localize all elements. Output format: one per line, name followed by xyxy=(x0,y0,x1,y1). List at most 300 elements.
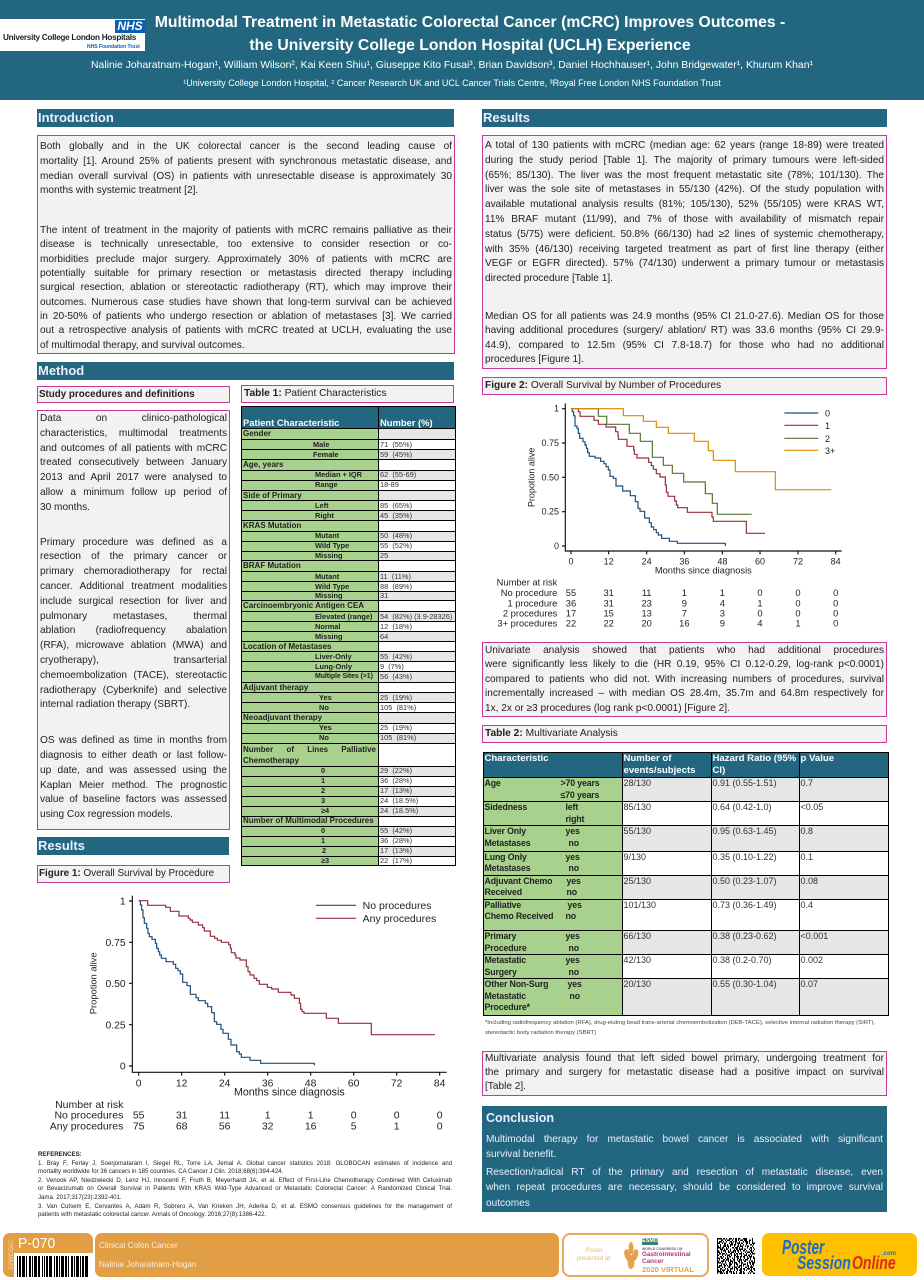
y axis tick labels: 1 xyxy=(120,897,126,908)
heading: Figure 1 xyxy=(37,865,230,883)
table 2: multivariate analysis: 0.7 xyxy=(800,778,813,788)
table 1: patient characteristics: 11 (11%) xyxy=(380,572,411,581)
table 1: patient characteristics: Location of Metastases xyxy=(243,642,331,651)
panel: study procedures text: characteristics, multimodal treatments xyxy=(40,428,227,439)
table 1: patient characteristics: 0 xyxy=(321,766,325,775)
table 2: multivariate analysis: 0.4 xyxy=(800,900,813,910)
presented at label: presented at: xyxy=(576,1256,612,1262)
table 2: multivariate analysis: no xyxy=(568,863,579,873)
table 2: multivariate analysis: events/subjects xyxy=(624,765,696,776)
table 2: multivariate analysis: 0.38 (0.2-0.70) xyxy=(712,955,772,965)
table 1: patient characteristics: 25 (19%) xyxy=(380,723,412,732)
y axis tick labels: 0.75 xyxy=(106,938,126,949)
references: patients with metastatic colorectal cancer. Annals of Oncology. 2016;27(8):1386-422. xyxy=(38,1211,266,1218)
table 2: multivariate analysis: Age xyxy=(484,778,501,788)
table 1: patient characteristics: 18-89 xyxy=(380,480,399,489)
ESMO mark: ESMO xyxy=(642,1238,658,1244)
table 1: patient characteristics: 1 xyxy=(321,776,325,785)
panel: study procedures text: Data on clinico-pathological xyxy=(40,413,227,424)
Online word: Online xyxy=(852,1253,896,1273)
number at risk table: 1 xyxy=(682,588,687,598)
chart: Figure 2 Kaplan-Meier xyxy=(497,403,842,629)
number at risk table: 32 xyxy=(262,1120,274,1132)
number at risk table: 1 xyxy=(394,1120,400,1132)
table 2: multivariate analysis: yes xyxy=(566,826,580,836)
table 2: multivariate analysis: p Value xyxy=(800,752,834,764)
panel: study procedures text: using Cox regression models. xyxy=(40,809,173,820)
header band xyxy=(0,0,924,100)
congress name: Gastrointestinal xyxy=(642,1251,691,1258)
panel: study procedures text: internal radiation therapy (SBRT). xyxy=(40,699,190,710)
axes xyxy=(562,403,842,554)
table 1: patient characteristics: Number (%) xyxy=(380,417,433,428)
number at risk table: 0 xyxy=(795,598,801,608)
number at risk table: 0 xyxy=(757,609,763,619)
x axis tick labels: 84 xyxy=(831,557,841,567)
table 1: patient characteristics: No xyxy=(319,733,329,742)
table 1: patient characteristics: Liver-Only xyxy=(315,652,352,661)
table 1: patient characteristics: 36 (28%) xyxy=(380,776,412,785)
presented at label: Poster xyxy=(585,1248,603,1254)
table 2: multivariate analysis: 28/130 xyxy=(624,778,651,788)
table 2: multivariate analysis: 55/130 xyxy=(624,826,651,836)
table 2: multivariate analysis: Metastatic xyxy=(484,991,526,1001)
table 1: patient characteristics: 24 (18.5%) xyxy=(380,796,418,805)
table 2: multivariate analysis: Hazard Ratio (95% xyxy=(712,752,796,764)
table 1: patient characteristics: 56 (43%) xyxy=(380,672,412,681)
panel: results text: VEGF or EGFR directed). 57% (74/130) underwent a primary tumour or metastasis xyxy=(485,258,884,269)
table 1: patient characteristics: Mutant xyxy=(315,572,339,581)
table 1: patient characteristics: Normal xyxy=(315,622,340,631)
table 1: patient characteristics: Multiple Sites (>1) xyxy=(315,673,373,680)
table 2: multivariate analysis: no xyxy=(566,887,577,897)
table 2: multivariate analysis: left xyxy=(566,802,578,812)
heading: Method: Method xyxy=(38,363,84,378)
table 1: patient characteristics: Patient Characteristic xyxy=(243,417,339,428)
legend: 1 xyxy=(825,421,830,431)
panel: introduction text: outcomes. Numerous case studies have shown that long-term survival can be achieved xyxy=(40,297,452,308)
x axis tick labels: Months since diagnosis xyxy=(234,1087,345,1099)
panel: study procedures text: Primary procedure was defined as a xyxy=(40,537,227,548)
heading: Table 1: Table 1: Patient Characteristics xyxy=(244,388,386,399)
table 2: multivariate analysis: 0.64 (0.42-1.0) xyxy=(712,802,772,812)
x axis tick labels: 36 xyxy=(679,557,689,567)
table 2: multivariate analysis: yes xyxy=(568,900,582,910)
number at risk table: 15 xyxy=(603,609,614,619)
table 1: patient characteristics: Range xyxy=(315,480,338,489)
heading: Figure 2: Figure 2: Overall Survival by Number of Procedures xyxy=(485,380,721,391)
table 2: multivariate analysis: >70 years xyxy=(560,778,600,788)
table 2: multivariate analysis: Palliative xyxy=(484,900,521,910)
x axis tick labels: 72 xyxy=(793,557,803,567)
x axis tick labels: 24 xyxy=(642,557,652,567)
author: Nalinie Joharatnam-Hogan xyxy=(99,1260,196,1269)
curve: no procedures xyxy=(139,901,314,1065)
axes xyxy=(129,896,447,1076)
number at risk table: 16 xyxy=(305,1120,317,1132)
table 1: patient characteristics: 105 (81%) xyxy=(380,703,416,712)
number at risk table: No procedures xyxy=(54,1110,123,1122)
panel: study procedures text: primary chemoradiotherapy for rectal xyxy=(40,566,227,577)
table 2: multivariate analysis: <0.05 xyxy=(800,802,823,812)
authors: Nalinie Joharatnam-Hogan¹, William Wilson², Kai Keen Shiu¹, Giuseppe Kito Fusai³, Brian Davidson³, Daniel Hochhauser¹, John Bridgewater¹, Khurum Khan¹ xyxy=(91,60,813,71)
table 1: patient characteristics: Number of Multimodal Procedures xyxy=(243,816,374,825)
presented at label xyxy=(576,1248,612,1262)
heading: Table 1 xyxy=(241,385,454,403)
number at risk table: 31 xyxy=(603,588,614,598)
panel: results text: (65%; 85/130). The liver was the most frequent metastatic site (78%; 101/130). The xyxy=(485,170,884,181)
table 1: patient characteristics: 2 xyxy=(321,786,325,795)
table 2: multivariate analysis: 42/130 xyxy=(624,955,651,965)
table 1: patient characteristics: BRAF Mutation xyxy=(243,561,301,570)
panel: study procedures text: value of baseline factors was assessed xyxy=(40,794,227,805)
panel: results text: 11% BRAF mutant (11/99), and 7% of those with availability of mismatch repair xyxy=(485,214,884,225)
legend: No procedures xyxy=(363,900,432,912)
number at risk table: Number at risk xyxy=(55,1099,124,1111)
panel: study procedures text: and outcomes of all patients with mCRC xyxy=(40,443,227,454)
number at risk table: 0 xyxy=(351,1110,357,1122)
table 1: patient characteristics: ≥4 xyxy=(321,806,329,815)
table 1: patient characteristics: Median + IQR xyxy=(315,470,362,479)
table 1: patient characteristics: 55 (42%) xyxy=(380,826,412,835)
table 2: multivariate analysis: yes xyxy=(566,876,581,886)
number at risk table: 0 xyxy=(437,1110,443,1122)
logo: UCLH NHS xyxy=(0,19,145,51)
table 2: multivariate analysis: Liver Only xyxy=(484,826,526,836)
legend xyxy=(316,900,436,925)
number at risk table xyxy=(50,1099,443,1132)
panel: study procedures text: up date, and was assessed using the xyxy=(40,765,227,776)
session code: 22WCGIC xyxy=(8,1240,15,1270)
references: or Bevacizumab on Overall Survival in Patients With KRAS Wild-Type Advanced or Metastatic Colorectal Cancer: A Randomized Clinical Trial. xyxy=(38,1185,452,1192)
panel: results text: status (5/75) were deficient. 50.8% (66/130) had ≥2 lines of systemic chemotherapy, xyxy=(485,229,884,240)
number at risk table: Any procedures xyxy=(50,1120,123,1132)
table 1: patient characteristics: Chemotherapy xyxy=(243,756,299,765)
conclusion text: survival benefit. xyxy=(486,1149,556,1160)
number at risk table: 3+ procedures xyxy=(497,619,558,629)
table 1: patient characteristics: 29 (22%) xyxy=(380,766,412,775)
table 2: multivariate analysis xyxy=(483,752,889,1016)
panel: study procedures text: cryotherapy), transarterial xyxy=(40,655,227,666)
table 2: multivariate analysis: yes xyxy=(566,852,580,862)
number at risk table: 1 procedure xyxy=(508,598,557,608)
y axis title: Propotion alive xyxy=(89,952,99,1014)
title: the University College London Hospital (UCLH) Experience xyxy=(249,37,691,54)
table 1: patient characteristics: 50 (48%) xyxy=(380,531,412,540)
table 1: patient characteristics: Elevated (range) xyxy=(315,612,373,621)
panel: study procedures text: diagnosis to either death or last follow- xyxy=(40,750,227,761)
number at risk table: 1 xyxy=(720,588,725,598)
table 2: multivariate analysis: 66/130 xyxy=(624,931,651,941)
y axis tick labels: 0 xyxy=(554,541,559,551)
x axis tick labels: Months since diagnosis xyxy=(655,566,752,576)
number at risk table: Number at risk xyxy=(497,578,558,588)
y axis tick labels: 1 xyxy=(554,404,559,414)
curve: 2 procedures xyxy=(571,409,752,514)
panel: study procedures text: include surgical resection for liver and xyxy=(40,596,227,607)
number at risk table: No procedure xyxy=(501,588,557,598)
curve: 3+ procedures xyxy=(571,409,831,490)
table 2: multivariate analysis: Sidedness xyxy=(484,802,527,812)
NHS lozenge: NHS xyxy=(117,19,143,33)
table 2: multivariate analysis: Chemo Received xyxy=(484,911,553,921)
table 1: patient characteristics: Number of Lines Palliative xyxy=(243,745,376,754)
table 1: patient characteristics: 55 (52%) xyxy=(380,541,412,550)
number at risk table: 55 xyxy=(566,588,576,598)
number at risk table: 0 xyxy=(833,609,838,619)
heading: Figure 2 xyxy=(482,377,887,395)
panel: study procedures text: chemoembolization (TACE), stereotactic xyxy=(40,670,227,681)
panel: introduction text: potentially suitable for primary resection or metastasis directed therapy including xyxy=(40,268,452,279)
heading: Results (left column): Results xyxy=(38,838,85,853)
title xyxy=(155,14,785,54)
table 2: multivariate analysis: Characteristic xyxy=(484,752,548,764)
table 1: patient characteristics: Left xyxy=(315,501,329,510)
table 1: patient characteristics: 85 (65%) xyxy=(380,501,412,510)
table 2: multivariate analysis: yes xyxy=(566,955,580,965)
panel: results text: procedures [Figure 1]. xyxy=(485,354,584,365)
table 2: multivariate analysis: Other Non-Surg xyxy=(484,979,548,989)
panel: multivariate summary text: [Table 2]. xyxy=(485,1081,526,1092)
panel: study procedures text: 2013 and April 2017 were analysed to xyxy=(40,472,227,483)
table 2 footnote: stereotactic body radiation therapy (SBRT) xyxy=(485,1030,596,1036)
heading: Results (right column) xyxy=(482,109,887,127)
references: 3. Van Cutsem E, Cervantes A, Adam R, Sobrero A, Van Krieken JH, Aderka D, et al. ESMO consensus guidelines for the management of xyxy=(38,1203,452,1210)
table 1: patient characteristics: 3 xyxy=(321,796,325,805)
number at risk table: 20 xyxy=(641,619,652,629)
table 2: multivariate analysis: no xyxy=(568,943,579,953)
panel: introduction text: months with systemic treatment [2]. xyxy=(40,185,198,196)
panel: introduction text xyxy=(37,135,455,354)
x axis tick labels: 0 xyxy=(568,557,574,567)
panel: univariate analysis text: were significantly less likely to die (HR 0.19, 95% CI 0.12-0.29, log-rank p<0.0001) xyxy=(485,659,884,670)
table 1: patient characteristics: 17 (13%) xyxy=(380,786,412,795)
table 1: patient characteristics: Side of Primary xyxy=(243,491,302,500)
table 1: patient characteristics: Wild Type xyxy=(315,582,349,591)
table 1: patient characteristics: Mutant xyxy=(315,531,339,540)
table 1: patient characteristics: Right xyxy=(315,511,334,520)
table 2: multivariate analysis: 0.35 (0.10-1.22) xyxy=(712,852,777,862)
curve: 1 procedure xyxy=(571,409,765,533)
legend: 0 xyxy=(825,408,830,418)
table 2: multivariate analysis: Received xyxy=(484,887,522,897)
table 2: multivariate analysis: 20/130 xyxy=(624,979,651,989)
table 2: multivariate analysis: Primary xyxy=(484,931,516,941)
table 2 footnote: *Including radiofrequency ablation (RFA), drug-eluting bead trans-arterial chemoembolization (DEB-TACE), selective internal radiation therapy (SIRT), xyxy=(485,1020,875,1026)
.com: .com xyxy=(882,1251,896,1257)
y axis title: Propotion alive xyxy=(527,448,537,507)
chart: Figure 1 Kaplan-Meier xyxy=(50,896,447,1132)
session: Clinical Colon Cancer xyxy=(99,1241,178,1250)
number at risk table: 0 xyxy=(833,598,838,608)
legend xyxy=(784,408,835,456)
congress name: WORLD CONGRESS ON xyxy=(642,1247,682,1251)
table 2: multivariate analysis: 0.002 xyxy=(800,955,823,965)
x axis tick labels: 60 xyxy=(348,1079,360,1090)
table 2: multivariate analysis: 9/130 xyxy=(624,852,646,862)
table 1: patient characteristics: Wild Type xyxy=(315,541,349,550)
curve: any procedures xyxy=(139,901,435,1035)
panel: multivariate summary text xyxy=(482,1051,887,1096)
number at risk table: 4 xyxy=(720,598,725,608)
table 2: multivariate analysis: Metastases xyxy=(484,863,530,873)
panel: multivariate summary text: Multivariate analysis found that left sided bowel primary, undergoing treatment for xyxy=(485,1053,884,1064)
table 1: patient characteristics: 1 xyxy=(321,836,325,845)
number at risk table: 55 xyxy=(133,1110,145,1122)
number at risk table xyxy=(497,578,838,629)
number at risk table: 5 xyxy=(351,1120,357,1132)
table 2: multivariate analysis: Procedure xyxy=(484,943,527,953)
table 2: multivariate analysis: 101/130 xyxy=(624,900,656,910)
panel: study procedures text: cancer. Additional treatment modalities xyxy=(40,581,227,592)
table 2: multivariate analysis: Metastases xyxy=(484,838,530,848)
heading: Results (left column) xyxy=(37,837,229,855)
panel: conclusion xyxy=(482,1106,887,1212)
x axis tick labels: 60 xyxy=(755,557,765,567)
number at risk table: 7 xyxy=(682,609,687,619)
table 1: patient characteristics: 0 xyxy=(321,826,325,835)
table 1: patient characteristics: Male xyxy=(313,440,329,448)
panel: study procedures text: treated consecutively between January xyxy=(40,457,227,468)
y axis tick labels: 0.50 xyxy=(541,472,559,482)
table 2: multivariate analysis: Adjuvant Chemo xyxy=(484,876,552,886)
trust name: NHS Foundation Trust xyxy=(87,44,140,50)
number at risk table: 2 procedures xyxy=(503,609,558,619)
panel: results text: during the study period [Table 1]. The majority of primary tumours were left-sided xyxy=(485,155,884,166)
number at risk table: 75 xyxy=(133,1120,145,1132)
table 2: multivariate analysis: no xyxy=(568,838,579,848)
table 1: patient characteristics: Lung-Only xyxy=(315,662,352,671)
references xyxy=(38,1151,452,1218)
y axis tick labels: 0.25 xyxy=(541,507,559,517)
hospital name: University College London Hospitals xyxy=(3,33,136,42)
table 1: patient characteristics: Yes xyxy=(319,723,332,732)
table 1: patient characteristics: 2 xyxy=(322,846,326,855)
poster number: P-070 xyxy=(18,1235,55,1252)
table 1: patient characteristics: 71 (55%) xyxy=(380,440,412,448)
table 2: multivariate analysis: 0.95 (0.63-1.45) xyxy=(712,826,777,836)
x axis tick labels: 36 xyxy=(262,1079,274,1090)
table 2: multivariate analysis: 0.55 (0.30-1.04) xyxy=(712,979,777,989)
panel: study procedures text: (RFA), microwave ablation (MWA) and xyxy=(40,640,227,651)
table 1: patient characteristics: Female xyxy=(313,450,338,458)
x axis tick labels: 84 xyxy=(434,1079,446,1090)
panel: study procedures text: radiotherapy (Cyberknife) and selective xyxy=(40,685,227,696)
x axis tick labels: 48 xyxy=(717,557,727,567)
table 1: patient characteristics: Gender xyxy=(243,429,271,438)
table 1: patient characteristics: Adjuvant therapy xyxy=(243,683,308,692)
table 1: patient characteristics: Missing xyxy=(315,632,343,641)
table 2: multivariate analysis: 0.8 xyxy=(800,826,813,836)
title: Multimodal Treatment in Metastatic Colorectal Cancer (mCRC) Improves Outcomes - xyxy=(155,14,785,31)
number at risk table: 31 xyxy=(603,598,614,608)
panel: results text: A total of 130 patients with mCRC (median age: 62 years (range 18-89) were treated xyxy=(485,140,884,151)
footer: presented at badge xyxy=(562,1233,709,1277)
table 1: patient characteristics xyxy=(241,406,456,866)
number at risk table: 3 xyxy=(720,609,725,619)
congress name: Cancer xyxy=(642,1258,664,1265)
y axis tick labels: 0.25 xyxy=(106,1020,126,1031)
x axis tick labels: 24 xyxy=(219,1079,231,1090)
heading: Figure 1: Figure 1: Overall Survival by Procedure xyxy=(39,868,214,879)
y axis tick labels xyxy=(106,897,126,1073)
number at risk table: 16 xyxy=(679,619,690,629)
references: Jama. 2017;317(23):2392-401. xyxy=(38,1194,122,1201)
QR code xyxy=(717,1238,755,1274)
table 2: multivariate analysis: right xyxy=(566,814,584,824)
panel: results text: directed procedure [Table 1]. xyxy=(485,273,613,284)
Poster word: Poster xyxy=(782,1237,824,1259)
heading: Introduction xyxy=(37,109,454,127)
x axis tick labels xyxy=(568,557,841,576)
Session word: Session xyxy=(797,1253,851,1273)
table 1: patient characteristics: 62 (55-69) xyxy=(380,470,416,479)
table 1: patient characteristics: 55 (42%) xyxy=(380,652,412,661)
panel: univariate analysis text xyxy=(482,642,887,717)
table 1: patient characteristics: 64 xyxy=(380,632,388,641)
table 2: multivariate analysis: Surgery xyxy=(484,967,517,977)
panel: study procedures text: pulmonary metastases, thermal xyxy=(40,611,227,622)
table 2: multivariate analysis: <0.001 xyxy=(800,931,828,941)
y axis tick labels: 0.75 xyxy=(541,438,559,448)
heading: Study procedures and definitions xyxy=(37,386,230,403)
number at risk table: 0 xyxy=(833,619,838,629)
footer: session and author bar xyxy=(95,1233,559,1277)
panel: results text: liver was the sole site of metastases in 55/130 (42%). Of the study population with xyxy=(485,184,884,195)
table 2: multivariate analysis: 25/130 xyxy=(624,876,651,886)
table 1: patient characteristics: No xyxy=(319,703,329,712)
number at risk table: 9 xyxy=(720,619,725,629)
number at risk table: 36 xyxy=(566,598,576,608)
table 1: patient characteristics: 25 (19%) xyxy=(380,693,412,702)
legend: 2 xyxy=(825,434,830,444)
table 2: multivariate analysis: Number of xyxy=(624,752,671,764)
number at risk table: 13 xyxy=(641,609,652,619)
panel: results text: with 35% (46/130) receiving targeted treatment as part of first line therapy (either xyxy=(485,244,884,255)
table 2 footnote xyxy=(485,1020,875,1036)
number at risk table: 0 xyxy=(437,1120,443,1132)
table 2: multivariate analysis: 0.91 (0.55-1.51) xyxy=(712,778,777,788)
panel: introduction text: median overall survival (OS) in patients with unresectable disease is approximately 30 xyxy=(40,171,452,182)
number at risk table: 1 xyxy=(308,1110,314,1122)
number at risk table: 9 xyxy=(682,598,687,608)
footer: poster number tab xyxy=(3,1233,93,1277)
table 2: multivariate analysis: 0.08 xyxy=(800,876,818,886)
table 1: patient characteristics: KRAS Mutation xyxy=(243,521,301,530)
panel: introduction text: Both globally and in the UK colorectal cancer is the second leading cause of xyxy=(40,141,452,152)
table 1: patient characteristics: 59 (45%) xyxy=(380,450,412,458)
table 2: multivariate analysis: Metastatic xyxy=(484,955,526,965)
y axis tick labels: 0 xyxy=(120,1062,126,1073)
conclusion heading: Conclusion xyxy=(486,1111,554,1125)
table 1: patient characteristics: Age, years xyxy=(243,460,283,469)
number at risk table: 1 xyxy=(795,619,801,629)
table 1: patient characteristics: 45 (35%) xyxy=(380,511,412,520)
table 2: multivariate analysis: 0.07 xyxy=(800,979,818,989)
number at risk table: 68 xyxy=(176,1120,188,1132)
congress name xyxy=(642,1247,691,1265)
panel: univariate analysis text: Univariate analysis showed that patients who had additional procedures xyxy=(485,645,884,656)
panel: results text: available mutational analysis results (81%; 105/130), 52% (55/105) were KRAS WT, xyxy=(485,199,884,210)
references: mortality worldwide for 36 cancers in 185 countries. CA Cancer J Clin. 2018;68(6):394-424. xyxy=(38,1168,283,1175)
panel: introduction text: out a retrospective analysis of patients with mCRC treated at UCLH, evaluating the use xyxy=(40,325,452,336)
table 2: multivariate analysis: 85/130 xyxy=(624,802,651,812)
panel: univariate analysis text: 1x, 2x or ≥3 procedures (log rank p<0.0001) [Figure 2]. xyxy=(485,703,730,714)
table 2: multivariate analysis: 0.50 (0.23-1.07) xyxy=(712,876,777,886)
table 2: multivariate analysis: Procedure* xyxy=(484,1002,530,1012)
table 2: multivariate analysis: 0.38 (0.23-0.62) xyxy=(712,931,777,941)
table 1: patient characteristics: Yes xyxy=(319,693,332,702)
